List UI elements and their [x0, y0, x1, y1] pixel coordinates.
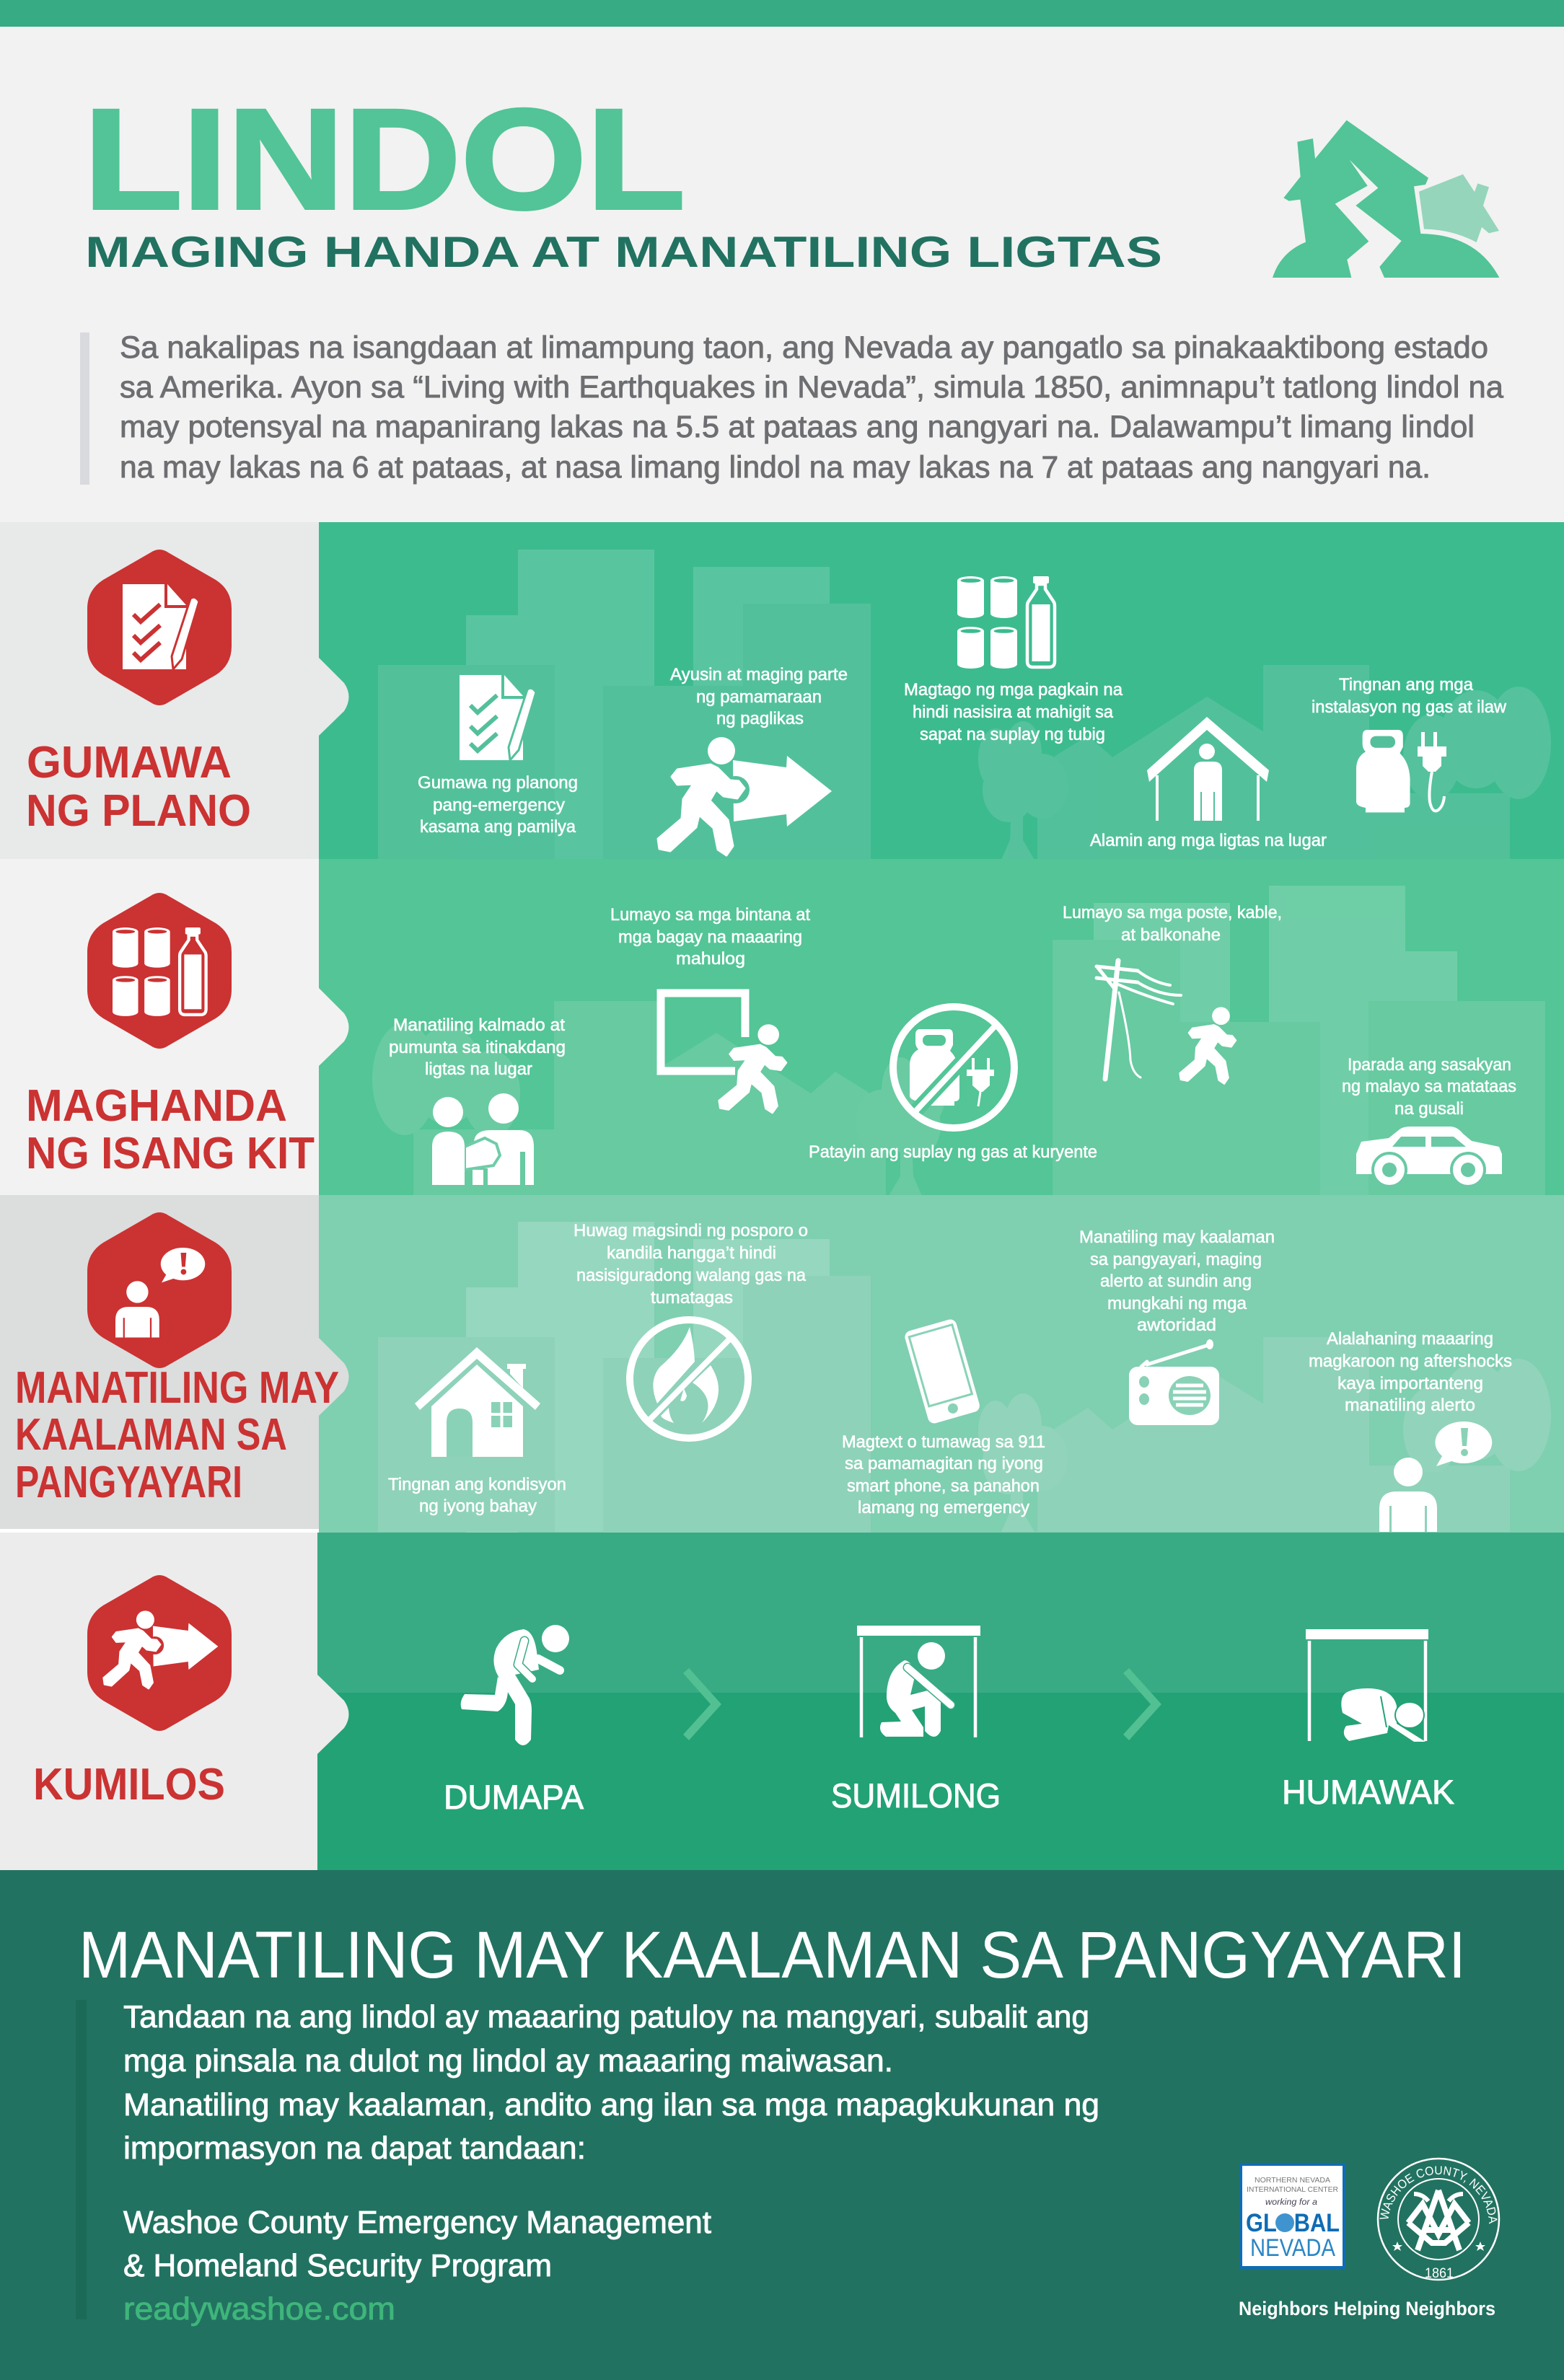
text: stay calm: Manatiling kalmado at — [393, 1015, 565, 1035]
icon: smart phone — [903, 1318, 981, 1425]
text: food storage: sapat na suplay ng tubig — [920, 725, 1105, 744]
heading: MANATILING MAY — [15, 1363, 339, 1413]
text: check house — [388, 1475, 566, 1516]
text: stay calm: ligtas na lugar — [425, 1059, 532, 1079]
icon: no flame — [630, 1320, 748, 1438]
panel: manatiling may kaalaman — [0, 1195, 1564, 1535]
text: call 911: smart phone, sa panahon — [847, 1476, 1040, 1496]
text: poles: at balkonahe — [1121, 925, 1221, 945]
icon: person with alert bubble — [1379, 1422, 1492, 1532]
icon: hold on — [1306, 1629, 1428, 1742]
footer heading: MANATILING MAY KAALAMAN SA PANGYAYARI — [79, 1918, 1466, 1992]
text: stay calm — [389, 1015, 566, 1079]
footer text block — [76, 1999, 1099, 2327]
logo: global nevada: INTERNATIONAL CENTER — [1247, 2185, 1338, 2194]
text: poles: Lumayo sa mga poste, kable, — [1063, 903, 1282, 922]
arrow: second chevron — [1123, 1668, 1161, 1740]
text: evacuation — [670, 665, 848, 728]
heading: KUMILOS — [33, 1760, 225, 1810]
text: stay alert: awtoridad — [1137, 1315, 1216, 1335]
icon: runner with arrow — [658, 737, 832, 855]
logo: global nevada: GLOBAL — [1246, 2209, 1340, 2237]
heading: KAALAMAN SA — [15, 1410, 287, 1460]
text: food storage: hindi nasisira at mahigit sa — [913, 702, 1114, 722]
text: aftershocks: manatiling alerto — [1345, 1396, 1475, 1415]
heading: GUMAWA — [27, 738, 232, 788]
footer text block: Manatiling may kaalaman, andito ang ilan sa mga mapagkukunan ng — [123, 2087, 1099, 2123]
footer text block: Tandaan na ang lindol ay maaaring patuloy na mangyari, subalit ang — [123, 1999, 1089, 2035]
icon: two people — [432, 1093, 534, 1185]
icon: action badge — [87, 1575, 232, 1731]
text: no matches: Huwag magsindi ng posporo o — [574, 1221, 808, 1240]
icon: runner — [1179, 1007, 1236, 1084]
logo: global nevada: NEVADA — [1250, 2234, 1335, 2262]
logo: global nevada: NORTHERN NEVADA — [1255, 2176, 1330, 2185]
text: gas and light: Tingnan ang mga — [1339, 675, 1474, 695]
text: stay alert: alerto at sundin ang — [1100, 1271, 1252, 1291]
text: windows: mahulog — [676, 949, 745, 969]
text: parking: ng malayo sa matataas — [1342, 1077, 1516, 1096]
text: evacuation: ng pamamaraan — [696, 687, 822, 707]
text: windows: Lumayo sa mga bintana at — [610, 905, 810, 925]
text: aftershocks: kaya importanteng — [1337, 1374, 1483, 1393]
heading — [26, 1081, 315, 1178]
icon: kit badge — [87, 893, 232, 1049]
footer text block: impormasyon na dapat tandaan: — [123, 2130, 586, 2166]
icon: radio — [1129, 1339, 1219, 1425]
text: aftershocks: Alalahaning maaaring — [1327, 1329, 1493, 1349]
title: LINDOL — [84, 79, 685, 239]
text: call 911: sa pamamagitan ng iyong — [845, 1454, 1043, 1473]
label: humawak: HUMAWAK — [1282, 1773, 1454, 1811]
text: windows: mga bagay na maaaring — [618, 927, 802, 947]
text: gas and light: instalasyon ng gas at ilaw — [1312, 697, 1507, 717]
footer text block: Washoe County Emergency Management — [123, 2205, 711, 2240]
icon: cracked house — [1273, 120, 1499, 278]
text: no matches: nasisiguradong walang gas na — [576, 1266, 807, 1285]
panel: header — [84, 79, 1499, 278]
subtitle: MAGING HANDA AT MANATILING LIGTAS — [85, 228, 1162, 276]
text: no matches: kandila hangga’t hindi — [607, 1243, 776, 1263]
text: evacuation: ng paglikas — [716, 709, 804, 728]
icon: car — [1356, 1127, 1502, 1186]
text: safe places: Alamin ang mga ligtas na lugar — [1090, 831, 1327, 850]
text: family plan — [418, 773, 578, 837]
text: shut off gas: Patayin ang suplay ng gas at kuryente — [809, 1142, 1097, 1162]
text: no matches: tumatagas — [651, 1288, 733, 1308]
text: parking: na gusali — [1394, 1099, 1464, 1119]
icon: plan badge — [87, 550, 232, 705]
text: food storage — [904, 680, 1123, 744]
text: family plan: Gumawa ng planong — [418, 773, 578, 793]
text: stay alert: mungkahi ng mga — [1107, 1294, 1247, 1313]
text: stay alert: Manatiling may kaalaman — [1079, 1228, 1275, 1247]
arrow: first chevron — [683, 1668, 721, 1740]
tagline: Neighbors Helping Neighbors — [1239, 2298, 1495, 2319]
intro text block: na may lakas na 6 at pataas, at nasa limang lindol na may lakas na 7 at pataas ang nangyari na. — [120, 450, 1431, 485]
footer text block: mga pinsala na dulot ng lindol ay maaaring maiwasan. — [123, 2043, 893, 2079]
icon: cover — [857, 1626, 980, 1737]
icon: gas tank and plug — [1356, 730, 1446, 812]
text: family plan: kasama ang pamilya — [420, 817, 576, 837]
text: parking: Iparada ang sasakyan — [1348, 1055, 1511, 1075]
text: call 911: Magtext o tumawag sa 911 — [842, 1432, 1045, 1452]
intro text block — [80, 330, 1503, 485]
text: gas and light — [1312, 675, 1507, 717]
heading: MAGHANDA — [26, 1081, 287, 1131]
icon: informed badge — [87, 1212, 232, 1368]
text: stay alert — [1079, 1228, 1275, 1335]
intro text block: may potensyal na mapanirang lakas na 5.5 at pataas ang nangyari na. Dalawampu’t limang lindol — [120, 410, 1475, 444]
logo: global nevada — [1241, 2164, 1344, 2267]
footer text block: readywashoe.com — [123, 2291, 395, 2327]
text: check house: Tingnan ang kondisyon — [388, 1475, 566, 1494]
logo: washoe county seal: WASHOE COUNTY, NEVADA — [1379, 2167, 1498, 2224]
top bar — [0, 0, 1564, 27]
icon: utility pole — [1097, 961, 1181, 1079]
text: windows — [610, 905, 810, 969]
icon: drop — [461, 1625, 569, 1745]
text: stay alert: sa pangyayari, maging — [1090, 1250, 1262, 1269]
text: family plan: pang-emergency — [433, 795, 565, 815]
logo: global nevada: working for a — [1265, 2197, 1317, 2207]
icon: window and runner — [661, 993, 786, 1113]
text: call 911: lamang ng emergency — [858, 1498, 1029, 1517]
heading: NG PLANO — [26, 786, 251, 836]
panel: kumilos — [0, 1533, 1564, 1870]
logo: washoe county seal: 1861 — [1425, 2266, 1454, 2281]
icon: document — [460, 675, 536, 760]
text: stay calm: pumunta sa itinakdang — [389, 1038, 566, 1057]
logo: washoe county seal — [1376, 2158, 1501, 2281]
text: poles — [1063, 903, 1282, 945]
text: parking — [1342, 1055, 1516, 1119]
footer text block: & Homeland Security Program — [123, 2248, 552, 2283]
heading: PANGYAYARI — [15, 1458, 242, 1507]
icon: no gas or power — [893, 1007, 1014, 1128]
heading — [26, 738, 251, 836]
text: check house: ng iyong bahay — [419, 1497, 537, 1516]
heading: NG ISANG KIT — [26, 1129, 315, 1178]
text: aftershocks: magkaroon ng aftershocks — [1309, 1352, 1512, 1371]
panel: gumawa ng plano — [0, 522, 1564, 863]
intro text block: Sa nakalipas na isangdaan at limampung taon, ang Nevada ay pangatlo sa pinakaaktibong estado — [120, 330, 1488, 365]
panel: footer — [0, 1870, 1564, 2380]
text: no matches — [574, 1221, 808, 1308]
intro text block: sa Amerika. Ayon sa “Living with Earthquakes in Nevada”, simula 1850, animnapu’t tatlong lindol na — [120, 370, 1503, 405]
icon: house — [415, 1347, 540, 1457]
text: aftershocks — [1309, 1329, 1512, 1415]
label: dumapa: DUMAPA — [444, 1778, 584, 1816]
panel: maghanda ng isang kit — [0, 859, 1564, 1199]
text: food storage: Magtago ng mga pagkain na — [904, 680, 1123, 700]
icon: safe house — [1147, 717, 1269, 821]
text: evacuation: Ayusin at maging parte — [670, 665, 848, 684]
text: call 911 — [842, 1432, 1045, 1517]
heading — [15, 1363, 339, 1507]
label: sumilong: SUMILONG — [831, 1776, 1001, 1815]
icon: food and water — [957, 576, 1055, 669]
